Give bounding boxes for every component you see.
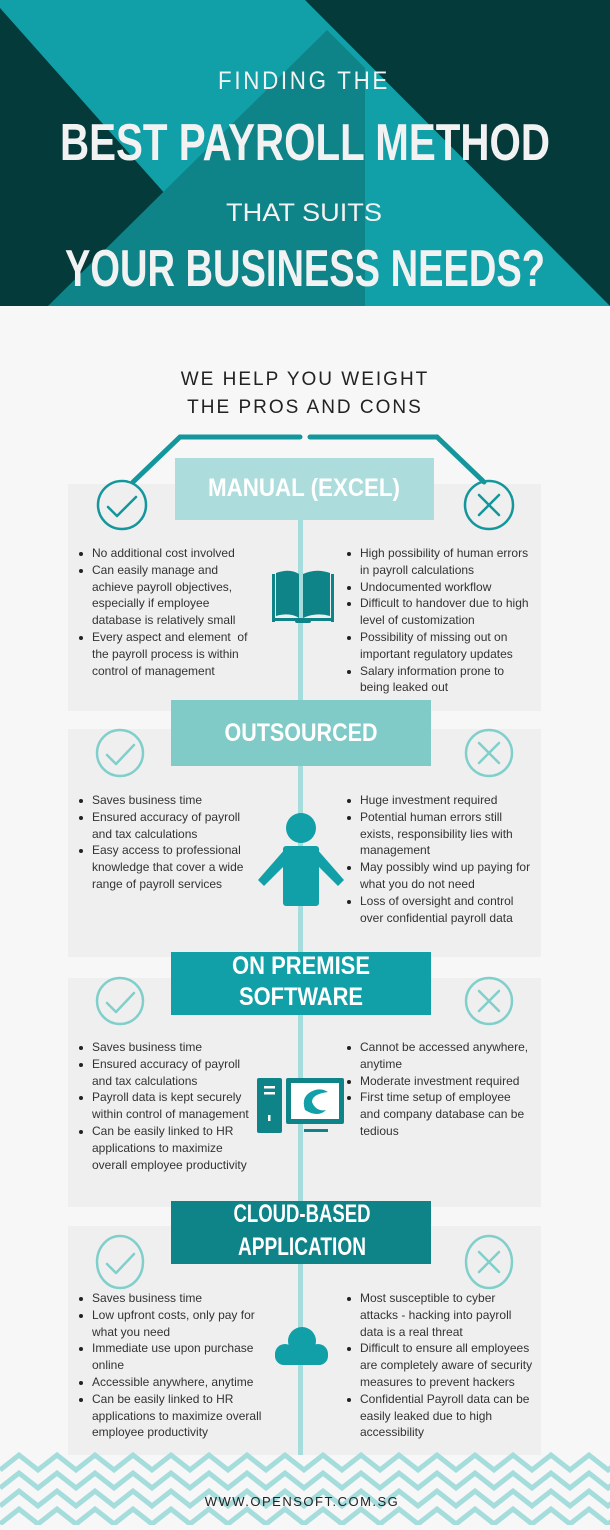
manual pros: Can easily manage and achieve payroll objectives, especially if employee database is relatively small (92, 563, 235, 627)
graphics: MANUAL (EXCEL) (208, 474, 400, 502)
graphics: ON PREMISE (232, 952, 370, 980)
on premise pros: Payroll data is kept securely within control of management (92, 1090, 249, 1121)
cloud cons: data is a real threat (360, 1325, 463, 1339)
on premise pros (79, 1040, 249, 1172)
manual cons: Difficult to handover due to high level of customization (360, 596, 529, 627)
icons check/x (97, 481, 513, 1288)
graphics: SOFTWARE (239, 983, 363, 1011)
title: THAT SUITS (226, 199, 382, 227)
on premise cons: Cannot be accessed anywhere, anytime (360, 1040, 528, 1071)
manual cons: Salary information prone to being leaked out (360, 664, 504, 694)
icon: computer (257, 1078, 344, 1133)
outsourced cons: May possibly wind up paying for what you do not need (360, 860, 530, 891)
manual pros (79, 546, 248, 678)
outsourced pros: Saves business time (92, 793, 202, 807)
manual pros: No additional cost involved (92, 546, 235, 560)
cloud cons: attacks - hacking into payroll (360, 1308, 511, 1322)
cloud pros: Saves business time (92, 1291, 202, 1305)
title: FINDING THE (218, 67, 390, 95)
on premise pros: Ensured accuracy of payroll and tax calculations (92, 1057, 240, 1088)
outsourced cons: Loss of oversight and control over confidential payroll data (360, 894, 513, 925)
footer: WWW.OPENSOFT.COM.SG (205, 1494, 399, 1509)
cloud pros: Low upfront costs, only pay for what you need (92, 1308, 255, 1339)
outsourced pros: Easy access to professional knowledge that cover a wide range of payroll services (92, 843, 243, 891)
on premise pros: Can be easily linked to HR applications to maximize overall employee productivity (92, 1124, 247, 1172)
manual cons: High possibility of human errors in payroll calculations (360, 546, 528, 577)
subtitle: THE PROS AND CONS (187, 397, 423, 418)
cloud cons (347, 1291, 532, 1439)
timeline line (298, 500, 303, 1455)
on premise pros: Saves business time (92, 1040, 202, 1054)
cloud pros (79, 1291, 261, 1439)
chevron pattern (0, 1455, 610, 1524)
manual cons (347, 546, 529, 694)
on premise cons (347, 1040, 528, 1138)
icon: book (272, 571, 334, 623)
on premise cons: Moderate investment required (360, 1074, 519, 1088)
outsourced cons: Huge investment required (360, 793, 497, 807)
header (0, 0, 610, 306)
cloud cons: Most susceptible to cyber (360, 1291, 495, 1305)
graphics: OUTSOURCED (224, 719, 378, 747)
manual pros: Every aspect and element of the payroll process is within control of management (92, 630, 247, 678)
graphics: APPLICATION (238, 1233, 366, 1261)
icon: cloud (275, 1327, 328, 1365)
panels (68, 484, 541, 711)
manual cons: Undocumented workflow (360, 580, 491, 594)
subtitle (180, 369, 429, 418)
cloud cons: Difficult to ensure all employees are completely aware of security measures to prevent hackers (360, 1341, 532, 1389)
title (60, 67, 550, 298)
graphics: CLOUD-BASED (234, 1200, 370, 1228)
outsourced cons: Potential human errors still exists, responsibility lies with management (360, 810, 513, 857)
icon: person (258, 813, 344, 906)
subtitle: WE HELP YOU WEIGHT (181, 369, 429, 390)
outsourced cons (347, 793, 530, 925)
title boxes (175, 458, 434, 520)
outsourced pros (79, 793, 243, 891)
bracket (133, 437, 484, 482)
outsourced pros: Ensured accuracy of payroll and tax calculations (92, 810, 240, 841)
manual cons: Possibility of missing out on important regulatory updates (360, 630, 513, 661)
cloud pros: Immediate use upon purchase online (92, 1341, 253, 1372)
on premise cons: First time setup of employee and company database can be tedious (360, 1090, 524, 1138)
cloud pros: Can be easily linked to HR applications to maximize overall employee productivity (92, 1392, 261, 1439)
cloud pros: Accessible anywhere, anytime (92, 1375, 253, 1389)
cloud cons: Confidential Payroll data can be easily leaked due to high accessibility (360, 1392, 529, 1439)
